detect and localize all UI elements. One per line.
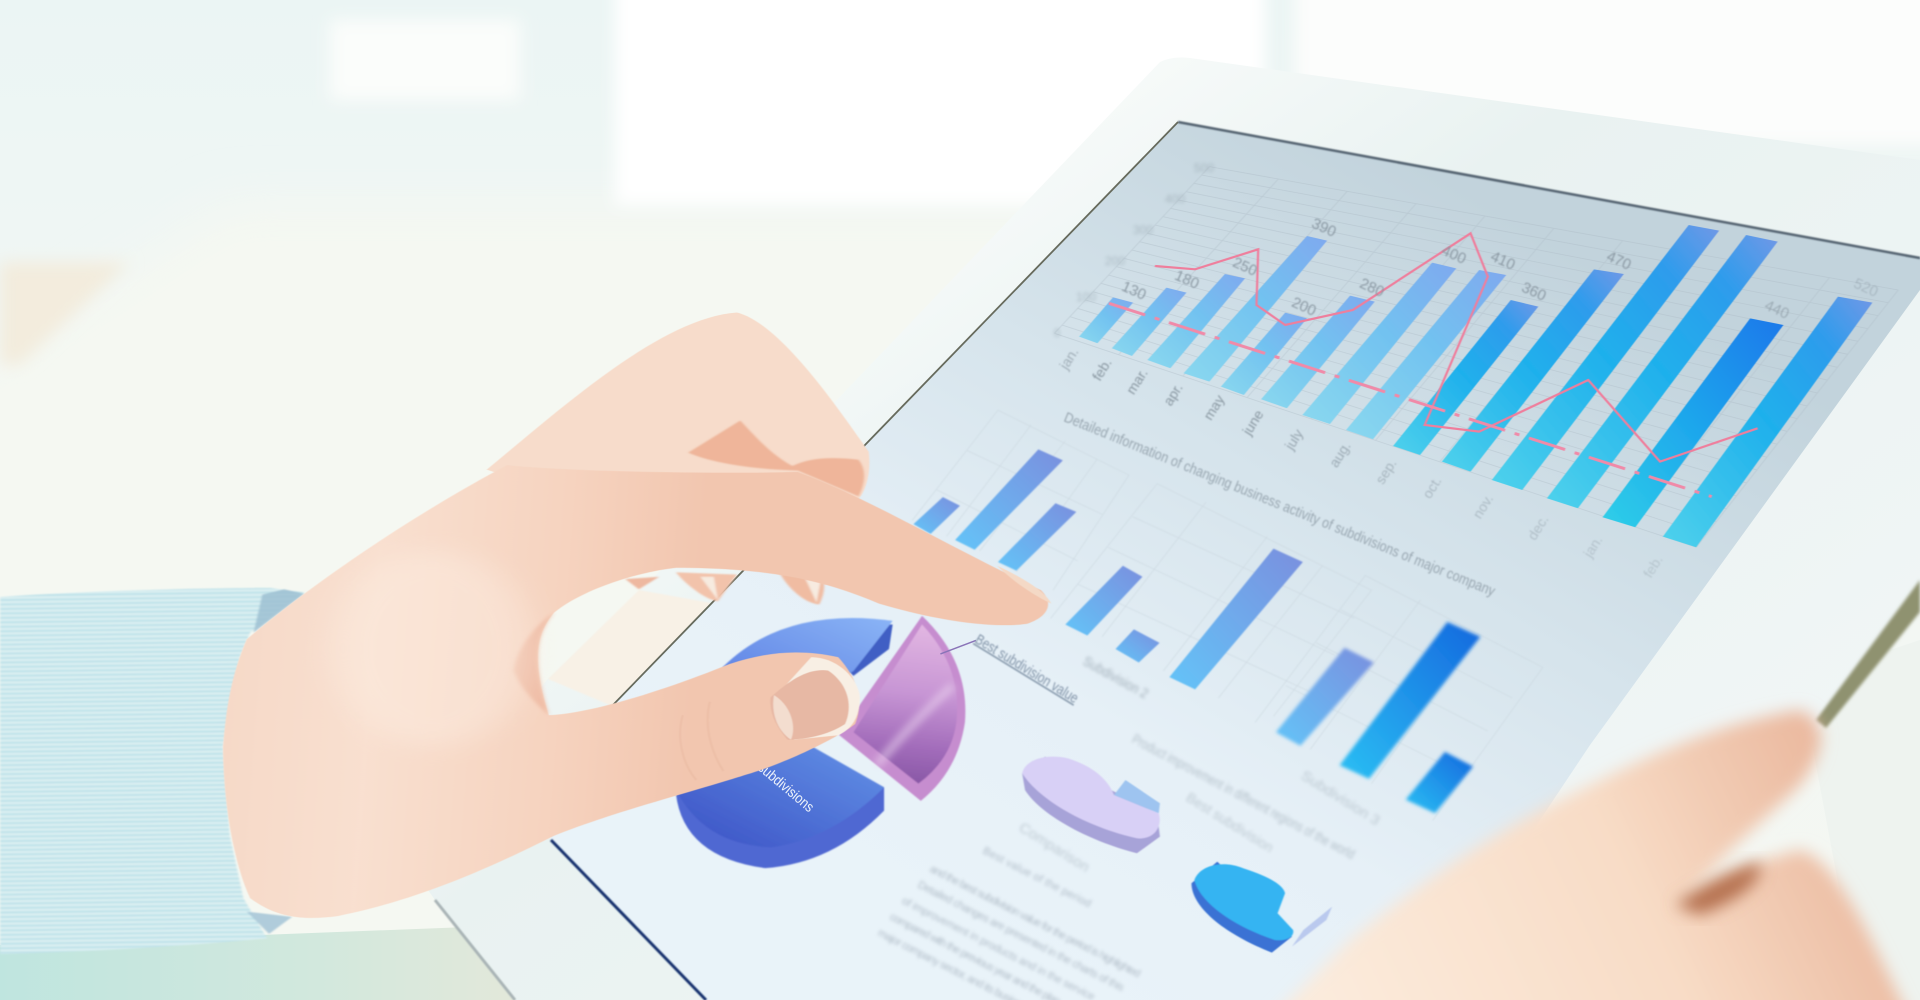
index finger nail edge [997,566,1051,604]
y axis labels [1054,161,1214,340]
cyan pie [1191,862,1332,953]
month labels: oct. [1419,474,1445,501]
bent middle finger [487,312,869,499]
chart captions [1016,653,1383,875]
leader line [940,640,976,654]
paragraph text block: Best value of the period [981,845,1093,910]
month labels: feb. [1640,552,1666,580]
pie slice: pink [839,616,965,801]
month labels [1055,345,1666,580]
thumb nail [770,657,860,740]
y axis labels: 200 [1105,254,1125,268]
thumb creases [680,702,723,780]
value labels: 250 [1230,254,1260,280]
pie label: subdivisions: subdivisions [754,760,817,816]
value labels: 440 [1762,297,1792,323]
month labels: sep. [1372,456,1400,487]
left chart bars [913,449,1076,571]
y axis labels: 300 [1133,223,1153,237]
month labels: feb. [1089,355,1115,383]
month labels: june [1238,407,1267,439]
tablet screen [525,122,1920,1000]
value labels: 360 [1519,279,1549,305]
y axis labels: 500 [1194,161,1214,175]
right hand, blurred foreground [1260,710,1915,1000]
inner shadow of middle finger [688,421,864,496]
main bar and line chart [1054,161,1898,580]
cuff inner top [254,589,304,633]
y axis labels: 400 [1165,192,1185,206]
paragraph text block [876,845,1142,1000]
value labels: 280 [1357,275,1387,301]
paragraph text block: and the best subdivision value for the period is highlighted [928,863,1142,980]
lower bar charts [912,410,1543,820]
month labels: jan. [1055,345,1082,373]
value labels: 180 [1172,267,1202,293]
chart captions: Best subdivision [1183,789,1277,856]
chart captions: Subdivision 2 [1081,653,1151,702]
pie slice: blue bottom [676,741,884,868]
cuff inner bottom [247,912,292,934]
value labels: 520 [1851,275,1881,301]
middle chart bars [1065,549,1303,689]
chart captions: Comparison [1016,819,1093,875]
large pie chart [676,616,976,868]
y axis labels: 100 [1076,290,1096,304]
month labels: mar. [1123,366,1151,397]
chart captions: Subdivision 3 [1298,767,1383,828]
month labels: dec. [1524,512,1552,543]
shirt sleeve [0,588,304,954]
pie slice: blue top [722,618,893,698]
value labels: 200 [1289,294,1319,320]
y axis labels: 0 [1054,326,1061,340]
left hand [223,312,1051,918]
right chart bars [1276,622,1480,813]
pink trend line [1109,233,1758,497]
curled finger tips and nails [625,568,824,604]
palm, index finger and thumb [223,465,1048,918]
value labels: 130 [1119,278,1149,304]
tablet frame [400,58,1920,1000]
value labels: 410 [1488,248,1518,274]
value labels: 390 [1309,215,1339,241]
small pie charts [1022,757,1332,953]
value labels [1119,215,1881,323]
paragraph text block: Detailed changes are presented in the charts of this [916,879,1126,994]
lavender pie [1022,757,1160,853]
month labels: july [1281,426,1306,453]
hand shadow in thumb web [514,612,554,715]
month labels: may [1200,392,1228,423]
small chart grids [912,410,1543,820]
chart grid [1054,167,1898,547]
month labels: jan. [1579,533,1606,561]
month labels: nov. [1469,491,1496,521]
month labels: apr. [1160,380,1186,408]
chart title: Detailed information of changing business activity of subdivisions of major company [1061,410,1498,600]
hand highlight [331,550,534,746]
value labels: 400 [1439,242,1469,268]
value labels: 470 [1604,248,1634,274]
chart captions: Product improvement in different regions of the world [1130,731,1358,862]
month labels: aug. [1326,439,1354,470]
pie label: best subdivision value: Best subdivision value [972,632,1081,707]
bars [1079,225,1872,547]
